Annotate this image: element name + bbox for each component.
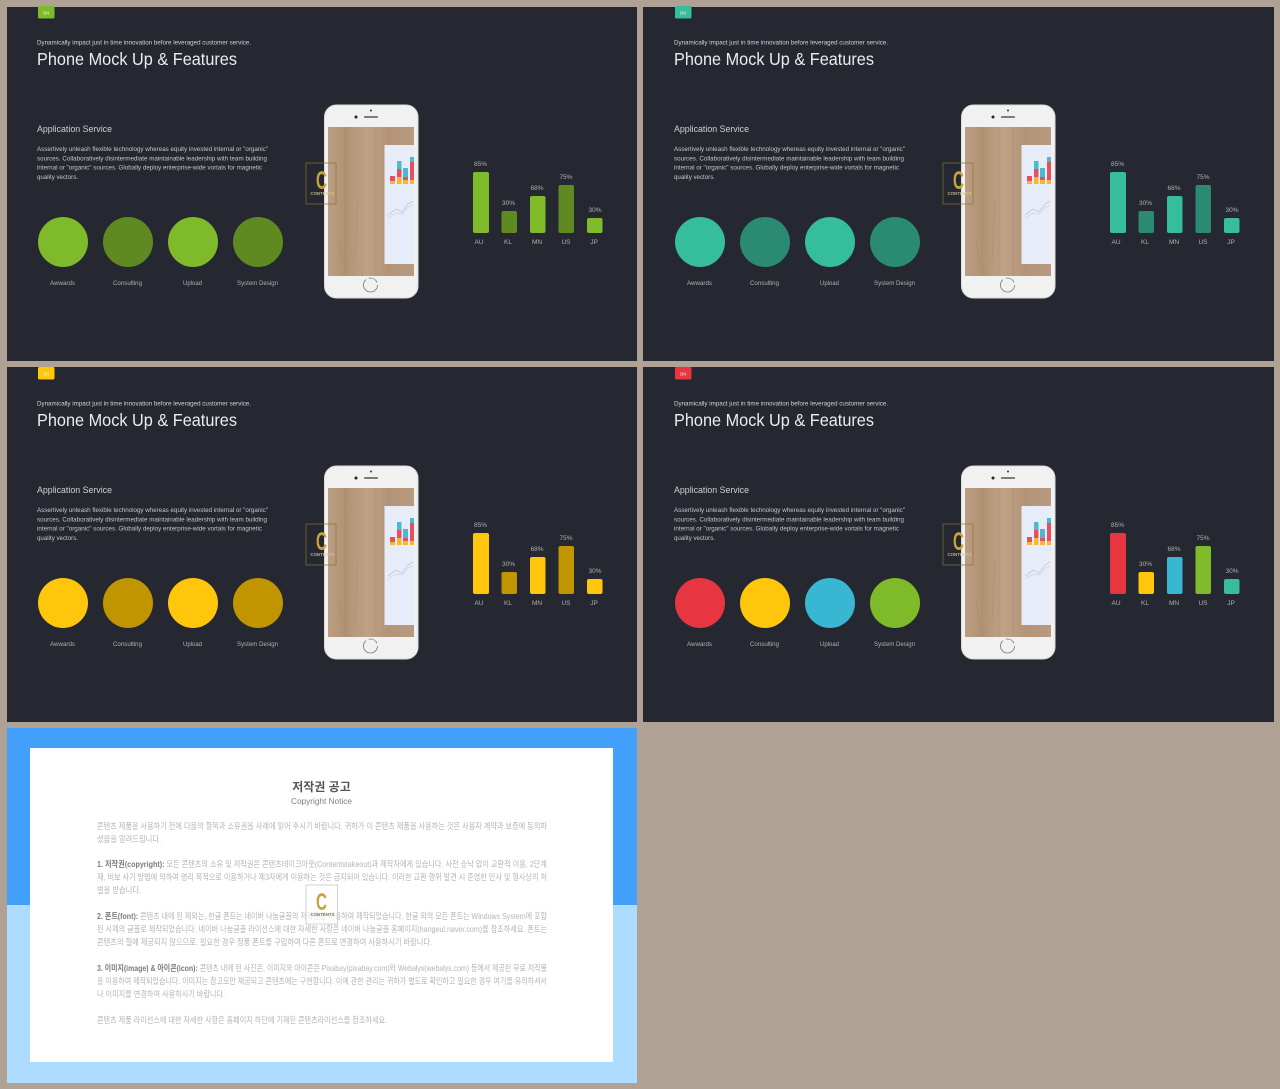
bar chart: AU: [1111, 600, 1121, 607]
heading: application service: Application Service: [37, 485, 112, 495]
bar chart: MN: [532, 239, 542, 246]
bar chart: 75%: [559, 174, 573, 181]
circle row: Upload: [820, 281, 839, 287]
logo: C: [316, 889, 327, 916]
section: font: 된 시제의 글꼴로 제작되었습니다. 네이버 나눔글꼴 라이선스에 대한 자세한 사항은 네이버 나눔글꼴 홈페이지(hangeul.naver.com)를 참조하세요. 폰트는: [97, 924, 547, 934]
circle row: System Design: [237, 281, 278, 287]
panel: yellow slide: [7, 367, 637, 722]
badge: [675, 6, 692, 18]
badge: [675, 367, 692, 380]
bar chart: 75%: [559, 535, 573, 542]
title: Phone Mock Up & Features: [674, 49, 874, 69]
notice footer: 콘텐츠 제품 라이선스에 대한 자세한 사항은 홈페이지 하단에 기재된 콘텐츠라이선스를 참조하세요.: [97, 1015, 387, 1025]
text block: sources. Collaboratively disintermediate maintainable leadership with team building: [37, 156, 267, 162]
notice intro: [97, 821, 547, 844]
circle row: System Design: [874, 642, 915, 648]
logo: C: [316, 167, 327, 195]
logo: CONTENTS: [310, 912, 334, 917]
bar chart: US: [561, 239, 571, 246]
title: Phone Mock Up & Features: [37, 410, 237, 430]
circle row: Upload: [183, 281, 202, 287]
phone mockup: [962, 105, 1055, 298]
circle row: [675, 578, 920, 648]
notice intro: 셨음을 알려드립니다.: [97, 834, 161, 844]
bar chart: 30%: [1225, 207, 1239, 214]
badge: BN: [680, 10, 686, 16]
text block: [674, 146, 905, 181]
section: image and icon: 나 이미지를 변경하여 사용하시기 바랍니다.: [97, 989, 225, 999]
bar chart: AU: [474, 600, 484, 607]
bar chart: [1110, 522, 1240, 607]
bar chart: JP: [590, 600, 598, 607]
subtitle: Dynamically impact just in time innovation before leveraged customer service.: [37, 40, 251, 46]
bar chart: US: [561, 600, 571, 607]
text block: quality vectors.: [37, 174, 78, 181]
circle row: Awwards: [687, 281, 712, 287]
logo: [943, 524, 973, 565]
text block: quality vectors.: [37, 535, 78, 542]
circle row: Consulting: [750, 642, 779, 648]
bar chart: [473, 522, 602, 607]
bar chart: [1110, 161, 1240, 246]
logo: C: [953, 528, 964, 556]
logo: CONTENTS: [310, 191, 334, 196]
circle row: Awwards: [50, 642, 75, 648]
logo: CONTENTS: [948, 191, 972, 196]
bar chart: AU: [474, 239, 484, 246]
panel: multicolour slide: [643, 367, 1274, 722]
circle row: Consulting: [113, 281, 142, 287]
bar chart: 30%: [1225, 568, 1239, 575]
logo: CONTENTS: [310, 552, 334, 557]
bar chart: KL: [1141, 239, 1149, 246]
circle row: Awwards: [50, 281, 75, 287]
notice intro: 콘텐츠 제품을 사용하기 전에 다음의 항목과 소유권을 사례에 읽어 주시기 바랍니다. 귀하가 이 콘텐츠 제품을 사용하는 것은 사용자 계약과 보증에 동의하: [97, 821, 547, 831]
heading: application service: Application Service: [674, 485, 749, 495]
badge: BN: [43, 372, 49, 376]
text block: internal or "organic" sources. Globally deploy enterprise-wide vortals for magnetic: [674, 526, 899, 532]
logo: CONTENTS: [948, 552, 972, 557]
title: Phone Mock Up & Features: [37, 49, 237, 69]
text block: internal or "organic" sources. Globally deploy enterprise-wide vortals for magnetic: [37, 164, 262, 172]
bar chart: US: [1198, 600, 1208, 607]
circle row: Consulting: [750, 281, 779, 287]
circle row: [675, 217, 920, 287]
circle row: System Design: [874, 281, 915, 287]
notice subtitle: Copyright Notice: [291, 796, 352, 806]
circle row: [38, 217, 283, 287]
bar chart: 30%: [588, 568, 602, 575]
text block: internal or "organic" sources. Globally deploy enterprise-wide vortals for magnetic: [674, 164, 899, 172]
bar chart: JP: [1227, 600, 1235, 607]
section: image and icon: 3. 이미지(image) & 아이콘(icon): 콘텐츠 내에 된 사진은, 이미지와 아이콘은 Pixabay(pixabay.com)와 Webalys(webalys.com) 등에서 제공된 무료 저작물: [97, 963, 547, 973]
text block: Assertively unleash flexible technology whereas equity invested internal or "organic": [37, 507, 268, 514]
text block: [37, 146, 268, 181]
text block: sources. Collaboratively disintermediate maintainable leadership with team building: [674, 156, 904, 162]
panel: teal slide: [643, 6, 1274, 361]
bar chart: 30%: [1139, 200, 1152, 207]
text block: Assertively unleash flexible technology whereas equity invested internal or "organic": [674, 507, 905, 514]
text block: quality vectors.: [674, 174, 715, 181]
bar chart: MN: [1169, 600, 1179, 607]
badge: BN: [43, 10, 49, 16]
text block: quality vectors.: [674, 535, 715, 542]
text block: internal or "organic" sources. Globally deploy enterprise-wide vortals for magnetic: [37, 526, 262, 532]
bar chart: MN: [532, 600, 542, 607]
circle row: Upload: [183, 642, 202, 648]
section: copyright: 재, 비보 사기 방법에 의하여 영리 목적으로 이용하거나 제3자에게 이용하는 것은 금지되어 있습니다. 이러한 교환 행위 발견 시 준엄한 민사 및 형사상의 처: [97, 872, 547, 882]
bar chart: 68%: [530, 185, 544, 192]
section: copyright: 벌을 받습니다.: [97, 885, 141, 895]
badge: [38, 367, 54, 380]
section: copyright: 1. 저작권(copyright): 모든 콘텐츠의 소유 및 저작권은 콘텐츠테이크아웃(Contentstakeout)과 제작자에게 있습니다. 사전 승낙 없이 교환적 이용, 2단계: [97, 859, 547, 869]
bar chart: MN: [1169, 239, 1179, 246]
badge: [38, 6, 54, 18]
logo: C: [316, 528, 327, 556]
panel: copyright notice: [7, 728, 637, 1083]
circle row: System Design: [237, 642, 278, 648]
bar chart: 68%: [1167, 546, 1181, 553]
bar chart: 75%: [1196, 174, 1210, 181]
section: copyright: [97, 859, 547, 895]
bar chart: 85%: [474, 522, 487, 529]
bar chart: 68%: [530, 546, 544, 553]
phone mockup: [962, 466, 1055, 659]
text block: sources. Collaboratively disintermediate maintainable leadership with team building: [37, 516, 267, 524]
subtitle: Dynamically impact just in time innovation before leveraged customer service.: [674, 40, 888, 46]
circle row: Consulting: [113, 642, 142, 648]
panel: green slide: [7, 6, 637, 361]
text block: Assertively unleash flexible technology whereas equity invested internal or "organic": [37, 146, 268, 153]
phone mockup: [324, 466, 418, 659]
bar chart: AU: [1111, 239, 1121, 246]
notice title: 저작권 공고: [292, 779, 351, 794]
text block: [674, 507, 905, 542]
subtitle: Dynamically impact just in time innovation before leveraged customer service.: [37, 400, 251, 408]
bar chart: KL: [1141, 600, 1149, 607]
bar chart: 30%: [1139, 561, 1152, 568]
logo: [943, 163, 973, 204]
bar chart: US: [1198, 239, 1208, 246]
section: font: [97, 911, 547, 947]
bar chart: JP: [590, 239, 598, 246]
title: Phone Mock Up & Features: [674, 410, 874, 430]
phone mockup: [324, 105, 418, 298]
text block: [37, 507, 268, 542]
subtitle: Dynamically impact just in time innovation before leveraged customer service.: [674, 400, 888, 408]
bar chart: JP: [1227, 239, 1235, 246]
bar chart: 68%: [1167, 185, 1181, 192]
section: font: 2. 폰트(font): 콘텐츠 내에 된 제외는, 한글 폰트는 네이버 나눔글꼴의 저작권을 사용하여 제작되었습니다. 한글 외의 모든 폰트는 Windows System에 포함: [97, 911, 547, 921]
bar chart: [473, 161, 602, 246]
bar chart: 30%: [502, 561, 515, 568]
bar chart: 75%: [1196, 535, 1210, 542]
text block: Assertively unleash flexible technology whereas equity invested internal or "organic": [674, 146, 905, 153]
bar chart: KL: [504, 239, 512, 246]
logo: [306, 885, 338, 924]
bar chart: 85%: [474, 161, 487, 168]
logo: [306, 163, 336, 204]
bar chart: 30%: [588, 207, 602, 214]
logo: [306, 524, 336, 565]
heading: application service: Application Service: [37, 124, 112, 134]
circle row: Upload: [820, 642, 839, 648]
bar chart: 85%: [1111, 522, 1124, 529]
text block: sources. Collaboratively disintermediate maintainable leadership with team building: [674, 516, 904, 524]
section: image and icon: [97, 963, 547, 999]
logo: C: [953, 167, 964, 195]
bar chart: KL: [504, 600, 512, 607]
circle row: Awwards: [687, 642, 712, 648]
section: font: 콘텐츠의 질에 제공되지 않으므로, 필요한 경우 정품 폰트를 구입하여 다른 폰트로 변경하여 사용하시기 바랍니다.: [97, 937, 432, 947]
badge: BN: [680, 372, 686, 376]
section: image and icon: 을 이용하여 제작되었습니다. 이미지는 참고모만 제공되고 콘텐츠에는 구현합니다. 이에 관한 관리는 귀하가 별도로 확인하고 필요한 경우 여기를 유의하셔서: [97, 976, 547, 986]
heading: application service: Application Service: [674, 124, 749, 134]
circle row: [38, 578, 283, 648]
bar chart: 85%: [1111, 161, 1124, 168]
bar chart: 30%: [502, 200, 515, 207]
